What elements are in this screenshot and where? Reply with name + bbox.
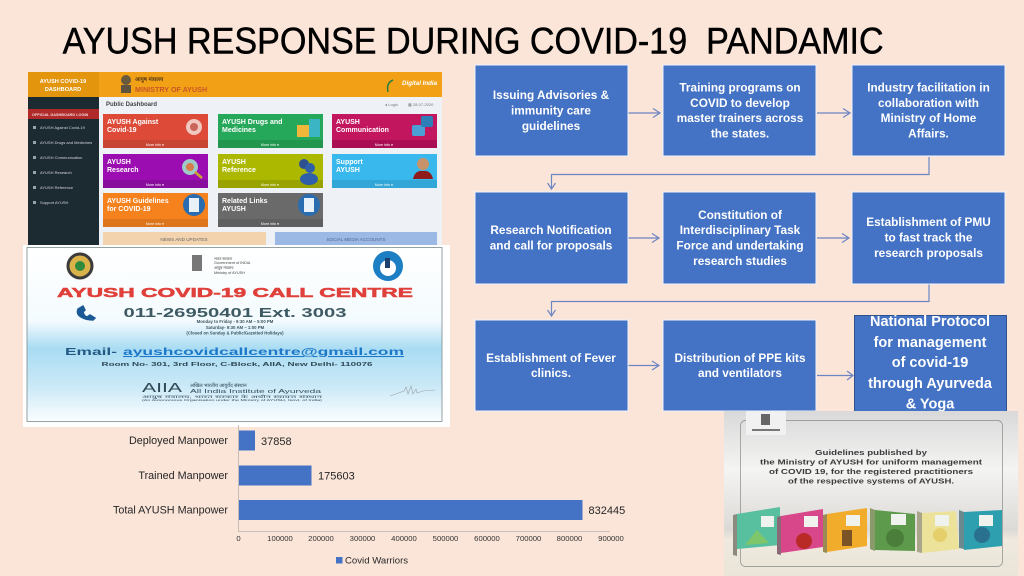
guidelines text: the Ministry of AYUSH for uniform management [760,458,983,466]
box: Training programs [663,65,816,156]
dashboard header: DASHBOARD [45,87,81,93]
card: AYUSH Against Covid-19: AYUSH Against [107,119,159,126]
box: Fever clinics: Establishment of Fever [486,351,616,365]
card: AYUSH Reference: More info ● [261,183,279,187]
AIIA logo block: आयुष मंत्रालय, भारत सरकार के अधीन स्वायत्त संस्थान [142,394,325,399]
AIIA logo block: अखिल भारतीय आयुर्वेद संस्थान [190,382,247,389]
guidelines text: of COVID 19, for the registered practitioners [769,467,973,476]
axis tick labels: 0 [236,534,241,543]
axis tick labels: 500000 [433,534,458,543]
box: Fever clinics: clinics. [531,366,571,380]
card: AYUSH Communication: AYUSH [336,119,360,126]
card: Support AYUSH: AYUSH [336,167,360,174]
dashboard screenshot: ◂ Login [385,102,398,107]
box: Research Notification: Research Notification [490,223,612,237]
card: AYUSH Research: AYUSH [107,159,131,166]
dashboard header: MINISTRY OF AYUSH [135,85,207,94]
box: PPE kits [663,320,816,411]
box: Industry facilitation: Affairs. [908,126,949,140]
email: Email- [65,346,118,358]
news and updates tab: NEWS AND UPDATES [160,237,208,242]
box: Issuing Advisories: guidelines [522,119,581,133]
bars [239,430,582,520]
category labels: Deployed Manpower [129,435,228,447]
dashboard sidebar: Support AYUSH [40,200,68,205]
axis tick labels: 900000 [598,534,624,543]
dashboard sidebar: AYUSH Drugs and Medicines [40,140,92,145]
email [65,346,404,358]
dashboard header [28,72,442,97]
box: Issuing Advisories [475,65,628,156]
card: AYUSH Research: More info ● [146,183,164,187]
card: AYUSH Guidelines [103,193,208,227]
axis tick labels: 300000 [350,534,375,543]
books [733,507,1002,556]
bar chart: manpower [113,425,625,566]
box: Establishment of PMU: to fast track the [885,230,973,244]
dashboard sidebar: AYUSH Against Covid-19 [40,125,86,130]
logo: helpline [373,251,403,281]
box: National Protocol [854,314,1006,412]
card: Related Links: More info ● [261,222,279,226]
email: ayushcovidcallcentre@gmail.com [123,346,404,358]
dashboard header: AYUSH COVID-19 [40,79,86,85]
emblem and ministry name: Government of INDIA [214,261,251,265]
news and updates tab [103,232,266,245]
box: Constitution of Task Force [663,192,816,284]
title: AYUSH RESPONSE DURING COVID-19 PANDAMIC [63,21,884,62]
box: Fever clinics [475,320,628,411]
box: Constitution of Task Force: Constitution of [698,208,782,222]
card: AYUSH Guidelines: for COVID-19 [107,206,151,213]
guidelines text [760,448,983,486]
bar values: 832445 [588,505,625,517]
bar values [261,436,625,517]
box: National Protocol: & Yoga [906,396,955,412]
axis lines [238,425,610,532]
card: AYUSH Reference [218,154,323,188]
axis tick labels: 700000 [516,534,541,543]
AIIA logo block [142,380,325,402]
axis tick labels: 600000 [474,534,500,543]
book label panels [761,514,993,527]
box: Training programs: Training programs on [679,80,801,94]
box: Industry facilitation [852,65,1005,156]
axis tick labels: 400000 [391,534,417,543]
card: AYUSH Against Covid-19 [103,114,208,148]
card: Related Links: Related Links [222,198,268,205]
opening hours: Saturday- 9:30 AM – 1:00 PM [206,325,265,330]
bar values: 37858 [261,436,292,448]
legend: Covid Warriors [345,556,408,566]
card: AYUSH Guidelines: AYUSH Guidelines [107,198,169,205]
AIIA logo block: (An Autonomous Organisation under the Ministry of AYUSH, Govt. of India) [142,398,322,402]
social media tab [275,232,437,245]
guidelines text: of the respective systems of AYUSH. [788,476,954,486]
opening hours [186,319,284,336]
signature [390,386,435,396]
dashboard sidebar: AYUSH Research [40,170,72,175]
category labels: Trained Manpower [138,470,228,482]
box: Industry facilitation: Industry facilitation in [867,80,990,94]
box: Issuing Advisories: Issuing Advisories & [493,88,610,102]
card: AYUSH Drugs and Medicines: More info ● [261,143,279,147]
category labels [113,435,228,516]
guidelines text: Guidelines published by [815,448,928,457]
box: Industry facilitation: collaboration with [878,96,979,110]
box: Issuing Advisories: immunity care [511,104,591,118]
box: National Protocol: for management [874,335,987,351]
opening hours: Monday to Friday - 9:30 AM – 5:00 PM [197,319,274,324]
bar values: 175603 [318,470,355,482]
AIIA logo block: All India Institute of Ayurveda [190,389,321,395]
flowchart arrows [548,108,929,380]
axis tick labels: 100000 [267,534,293,543]
box: PPE kits: Distribution of PPE kits [674,351,806,365]
card: AYUSH Against Covid-19: Covid-19 [107,127,137,134]
card: AYUSH Research: Research [107,167,139,174]
emblem and ministry name: आयुष मंत्रालय [214,265,234,271]
card: AYUSH Communication: Communication [336,127,389,134]
box: PPE kits: and ventilators [698,366,782,380]
emblem and ministry name: Ministry of AYUSH [214,271,245,275]
dashboard header: आयुष मंत्रालय [135,76,164,83]
card: AYUSH Research [103,154,208,188]
box: National Protocol: through Ayurveda [868,376,993,392]
card: AYUSH Reference: Reference [222,167,256,174]
call centre poster [23,245,450,427]
dashboard screenshot [28,72,442,245]
dashboard sidebar [28,97,99,245]
box: Constitution of Task Force: research studies [693,254,787,268]
card: AYUSH Guidelines: More info ● [146,222,164,226]
dashboard screenshot: ▦ 28-07-2020 [408,102,434,107]
dashboard sidebar: AYUSH Reference [40,185,74,190]
social media tab: SOCIAL MEDIA ACCOUNTS [326,237,386,242]
icon: phone [77,306,95,320]
card: AYUSH Communication [332,114,437,148]
box: Establishment of PMU [852,192,1005,284]
poster heading: AYUSH COVID-19 CALL CENTRE [57,286,413,300]
card: AYUSH Reference: AYUSH [222,159,246,166]
card: Related Links [218,193,323,227]
box: Training programs: COVID to develop [690,96,790,110]
emblem and ministry name: भारत सरकार [214,257,232,261]
axis tick labels: 800000 [557,534,582,543]
AIIA logo block: AIIA [142,380,183,395]
emblem and ministry name [192,255,251,275]
card: Support AYUSH: Support [336,159,363,166]
box: Research Notification [475,192,628,284]
dashboard header: Digital India [402,80,438,87]
box: National Protocol: National Protocol [870,314,990,330]
category labels: Total AYUSH Manpower [113,504,228,516]
box: Constitution of Task Force: Force and undertaking [676,238,804,252]
dashboard screenshot: Public Dashboard [106,102,157,108]
card: AYUSH Communication: More info ● [375,143,393,147]
card: Support AYUSH [332,154,437,188]
emblem tab [746,411,786,435]
card: AYUSH Against Covid-19: More info ● [146,143,164,147]
box: Research Notification: and call for proposals [490,238,613,252]
box: Establishment of PMU: Establishment of PMU [866,215,991,229]
box: Training programs: master trainers across [677,111,804,125]
guidelines poster [724,411,1018,576]
axis tick labels: 200000 [308,534,334,543]
card: AYUSH Drugs and Medicines: Medicines [222,127,256,134]
card: AYUSH Drugs and Medicines: AYUSH Drugs and [222,119,282,126]
dashboard sidebar: AYUSH Communication [40,155,82,160]
card: Support AYUSH: More info ● [375,183,393,187]
card: Related Links: AYUSH [222,206,246,213]
box: National Protocol: of covid-19 [892,355,968,371]
phone number: 011-26950401 Ext. 3003 [124,306,347,320]
box: Establishment of PMU: research proposals [874,246,983,260]
box: Training programs: the states. [711,126,769,140]
dashboard sidebar: OFFICIAL DASHBOARD LOGIN [32,113,89,117]
logo: institute [68,254,92,278]
box: Constitution of Task Force: Interdisciplinary Task [680,223,801,237]
axis tick labels [236,534,624,543]
opening hours: (Closed on Sunday & Public/Gazetted Holidays) [186,330,284,336]
box: Industry facilitation: Ministry of Home [881,111,977,125]
card: AYUSH Drugs and Medicines [218,114,323,148]
address: Room No- 301, 3rd Floor, C-Block, AIIA, New Delhi- 110076 [102,362,372,368]
